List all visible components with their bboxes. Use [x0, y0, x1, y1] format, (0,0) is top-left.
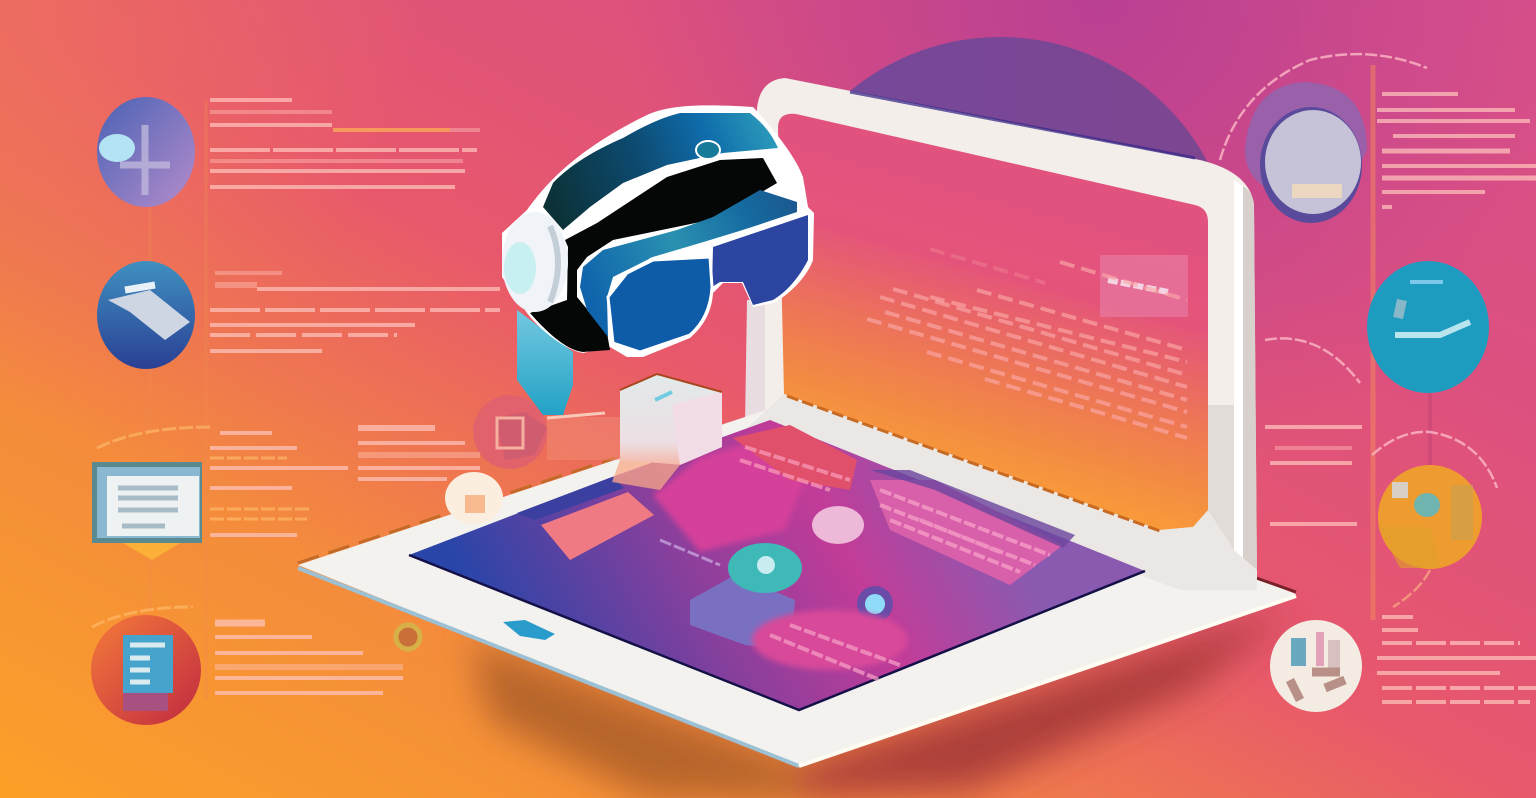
item 5: silver globe and text — [1220, 54, 1536, 223]
arc above book — [97, 427, 210, 448]
item 2: cloud globe and text — [97, 261, 500, 369]
icon: red badge with document — [91, 615, 201, 725]
VR headset — [502, 105, 814, 415]
text block 3 — [210, 433, 348, 535]
left bar tint — [745, 300, 765, 425]
black band — [530, 158, 777, 352]
top dial — [696, 141, 720, 159]
shell — [543, 113, 778, 230]
screen inner panel — [778, 114, 1208, 530]
small ring icon — [396, 625, 420, 649]
tablet drop shadow — [470, 610, 1290, 798]
floating cream orb — [445, 472, 503, 524]
text block 2 — [210, 273, 500, 351]
front dark blue — [712, 215, 808, 305]
connector and arcs — [1428, 393, 1432, 465]
item 8: cream circle and text — [1270, 617, 1536, 712]
floating red circle icon — [473, 395, 620, 469]
screen content blobs — [517, 425, 1075, 680]
rear goggle — [580, 190, 797, 337]
white stripe — [563, 156, 780, 233]
item 4: red badge and text — [91, 607, 403, 725]
text block 8 — [1377, 617, 1536, 702]
text block 5 — [1377, 94, 1536, 207]
icon: purple globe — [97, 97, 195, 207]
left connector lines — [150, 100, 206, 700]
icon: open book — [92, 462, 202, 560]
floating cube — [612, 374, 722, 490]
laptop screen frame — [745, 78, 1257, 590]
mid right text block — [1265, 338, 1362, 524]
icon: silver globe — [1245, 82, 1367, 223]
item 1: globe and text — [97, 97, 480, 207]
arc over globe — [1220, 54, 1427, 160]
lens — [608, 257, 712, 352]
right vertical connector — [1370, 65, 1376, 620]
frame dark top edge — [850, 92, 1195, 158]
icon: blue globe — [97, 261, 195, 369]
base edge highlights — [298, 568, 799, 766]
text block 4 — [215, 623, 403, 693]
arc above badge — [92, 607, 193, 627]
tablet screen — [409, 420, 1145, 710]
purple semicircle behind screen — [765, 37, 1235, 507]
headset outline — [502, 105, 814, 357]
earcup — [502, 212, 568, 312]
strap — [517, 310, 573, 415]
item 6: teal globe — [1367, 261, 1489, 393]
icon: cream circle — [1270, 620, 1362, 712]
home button — [503, 620, 555, 640]
frame shading right — [1243, 186, 1257, 570]
text block 3b — [358, 428, 480, 479]
screen overlap — [745, 394, 1257, 590]
item 3: book and text — [92, 427, 480, 560]
screen text block — [867, 249, 1188, 438]
tablet base — [298, 394, 1296, 767]
text block 1 — [210, 100, 480, 187]
item 7: orange globe — [1372, 393, 1497, 607]
